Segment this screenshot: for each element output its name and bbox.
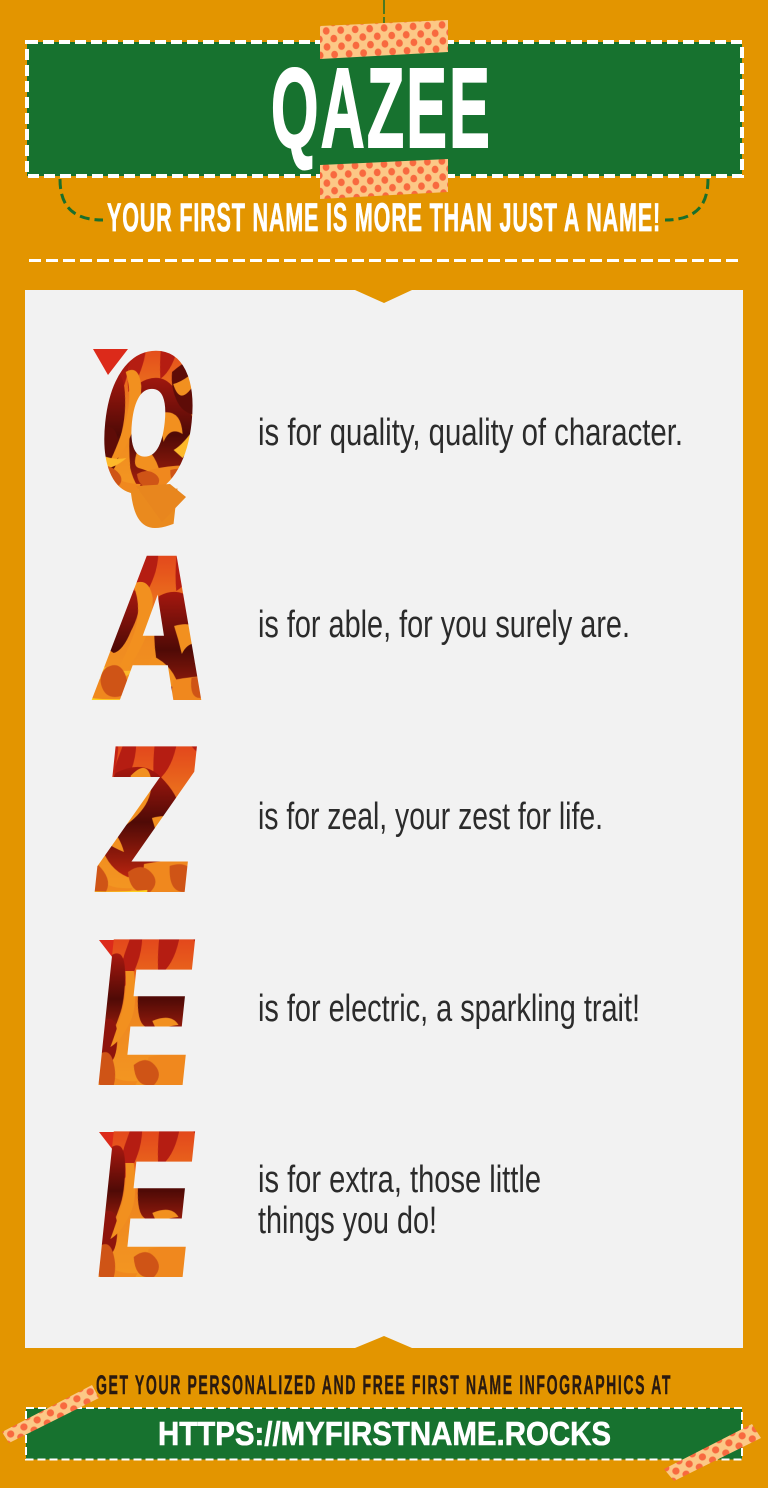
footer banner	[26, 1408, 742, 1460]
row: Z	[89, 707, 603, 931]
title: QAZEE	[271, 45, 492, 171]
letter Q: Q	[96, 324, 201, 522]
text: Z: is for zeal, your zest for life.	[258, 796, 603, 838]
row: A	[88, 518, 630, 739]
row: E	[88, 900, 640, 1124]
text: E: is for electric, a sparkling trait!	[258, 988, 640, 1030]
row: E second	[88, 1092, 541, 1316]
url: HTTPS://MYFIRSTNAME.ROCKS	[158, 1415, 611, 1452]
tape: footer left	[2, 1385, 99, 1443]
tape: bottom	[320, 159, 448, 199]
header banner	[27, 42, 742, 176]
text: A: is for able, for you surely are.	[258, 604, 630, 646]
connector: left	[60, 179, 103, 220]
letter A: A	[88, 518, 220, 739]
panel: letters	[25, 290, 743, 1348]
divider	[29, 259, 739, 262]
tape: top	[320, 20, 448, 59]
text: E second	[258, 1159, 541, 1242]
row: Q	[93, 324, 683, 522]
connector: right	[665, 179, 708, 220]
hanging line	[383, 0, 385, 24]
letter E second: E	[88, 1092, 205, 1316]
letter E: E	[88, 900, 205, 1124]
letter Z: Z	[89, 707, 205, 931]
text: E second: things you do!	[258, 1200, 437, 1242]
tape: footer right	[664, 1424, 761, 1481]
text: E second: is for extra, those little	[258, 1159, 541, 1201]
